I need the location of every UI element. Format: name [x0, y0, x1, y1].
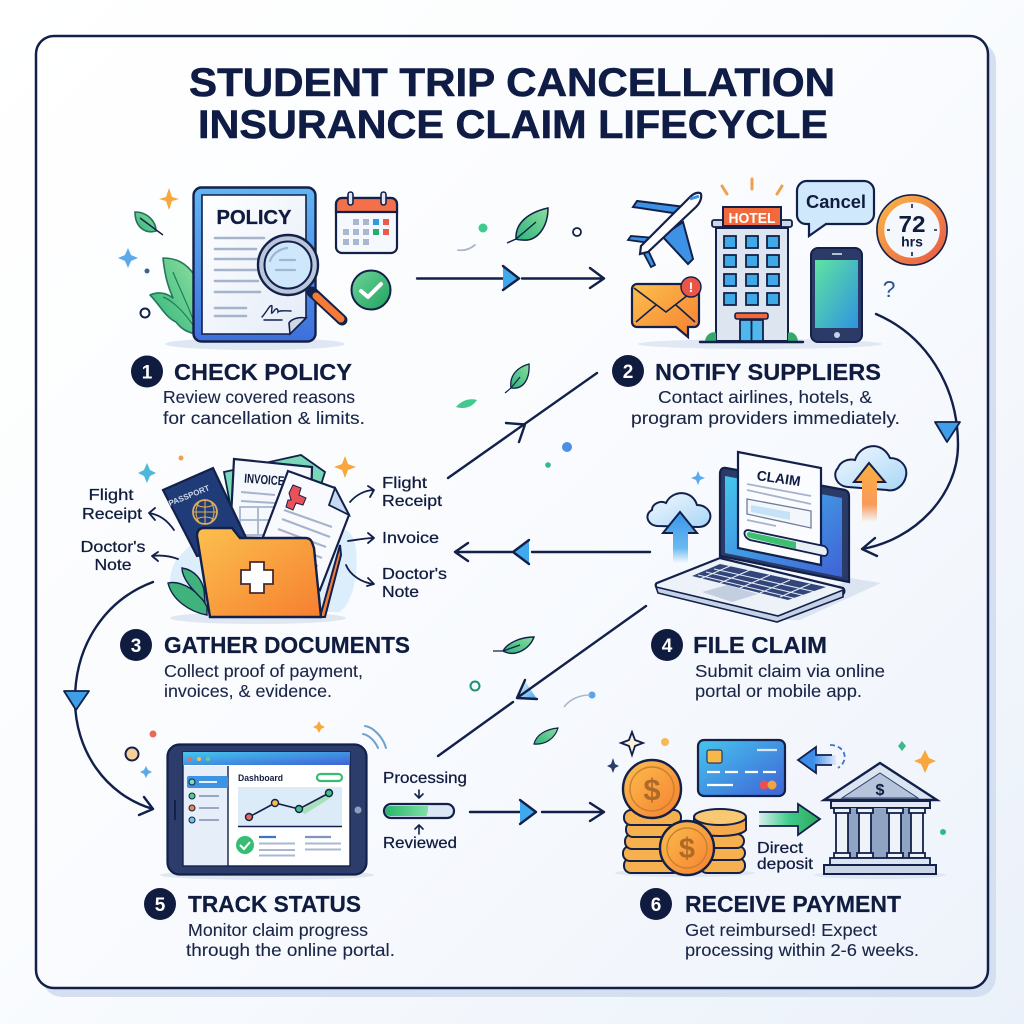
title — [189, 61, 835, 147]
laptop screen — [720, 468, 849, 582]
document labels: Note — [94, 557, 132, 574]
laptop shadow — [780, 578, 881, 620]
badge 3 — [120, 629, 152, 661]
icon: 72 hrs clock: 72 — [898, 211, 926, 237]
icon: envelope with alert: ! — [689, 279, 693, 295]
step 4 description — [695, 661, 885, 701]
icon: hotel: HOTEL — [728, 210, 776, 227]
badge 5: 5 — [155, 895, 166, 916]
check and detail lines — [236, 836, 341, 856]
step 5 description — [186, 920, 395, 960]
icon: step 4 file claim illustration — [647, 446, 906, 622]
processing status gauge: Processing — [383, 770, 467, 787]
step 6 description: processing within 2-6 weeks. — [685, 940, 919, 960]
processing status gauge — [383, 770, 467, 852]
icon: step 1 policy illustration — [118, 188, 397, 350]
document labels: Receipt — [382, 493, 443, 510]
sparkles — [138, 456, 356, 483]
step 6 description — [685, 920, 919, 960]
step 2 heading — [612, 355, 881, 387]
icon: tablet — [168, 744, 366, 874]
icon: 72 hrs clock: hrs — [901, 234, 923, 250]
icon: question mark: ? — [883, 276, 895, 302]
icon: return arrow to card — [798, 745, 845, 773]
icon: bank building — [824, 763, 937, 874]
document labels: Invoice — [382, 530, 439, 547]
document labels: Doctor's — [382, 566, 447, 583]
arrow: step 2 to step 4 — [862, 314, 960, 556]
sparkles — [607, 732, 946, 835]
direct deposit label — [757, 840, 814, 873]
icon: coin stack — [623, 760, 746, 875]
step 5 heading — [144, 888, 361, 920]
icon: medical cross — [241, 562, 273, 593]
icon: step 2 notify suppliers illustration — [628, 179, 947, 349]
badge 2: 2 — [623, 362, 633, 383]
tablet screen — [183, 752, 350, 866]
document labels: Flight — [88, 487, 134, 504]
icon: leaves — [168, 568, 207, 615]
badge 6 — [640, 888, 672, 920]
badge 1 — [131, 356, 163, 388]
step 4 description: portal or mobile app. — [695, 681, 862, 701]
document labels — [80, 475, 447, 601]
icon: bank building: $ — [876, 782, 885, 799]
title: STUDENT TRIP CANCELLATION — [189, 61, 835, 105]
icon: step 6 receive payment illustration — [607, 732, 946, 879]
document labels: Receipt — [82, 506, 143, 523]
icon: step 3 gather documents illustration — [80, 455, 447, 624]
step 2 description — [631, 387, 900, 428]
step 1 heading — [131, 356, 352, 388]
wifi arcs — [363, 726, 386, 748]
icon: green check — [352, 270, 390, 310]
icon: left cloud upload — [647, 493, 710, 563]
step 3 heading — [120, 629, 410, 661]
signature — [262, 306, 291, 320]
laptop base — [656, 558, 844, 618]
document labels: Note — [382, 584, 419, 601]
progress bar — [744, 530, 828, 556]
icon: cancel speech bubble: Cancel — [806, 192, 866, 212]
step 1 description: for cancellation & limits. — [163, 408, 365, 428]
icon: coin stack: $ — [679, 833, 695, 865]
step 4 heading: FILE CLAIM — [693, 632, 827, 658]
step 5 description: through the online portal. — [186, 940, 395, 960]
badge 6: 6 — [651, 895, 661, 916]
badge 4: 4 — [662, 636, 673, 657]
icon: right cloud upload — [835, 446, 906, 522]
icon: coin stack: $ — [643, 772, 661, 807]
sparkles and small leaf — [118, 188, 179, 318]
icon: passport — [163, 468, 250, 556]
decorative leaves and dots along the flow — [456, 208, 596, 744]
step 3 description — [164, 661, 363, 701]
step 6 heading — [640, 888, 901, 920]
icon: step 5 track status illustration — [126, 721, 467, 880]
icon: folder front — [197, 528, 321, 617]
icon: page curl — [289, 318, 306, 334]
icon: credit card — [698, 740, 785, 796]
step 1 description — [163, 387, 365, 428]
icon: cancel speech bubble — [797, 181, 874, 236]
keyboard — [692, 564, 826, 600]
arrow: step 2 to step 3 — [448, 373, 597, 478]
dashboard title: Dashboard — [238, 773, 283, 783]
direct deposit label: Direct — [757, 840, 804, 857]
icon: calendar — [336, 192, 397, 253]
icon: green sheet — [224, 455, 325, 530]
document labels: Flight — [382, 475, 428, 492]
badge 2 — [612, 355, 644, 387]
document labels: Doctor's — [80, 539, 146, 556]
window title bar — [183, 752, 350, 765]
title: INSURANCE CLAIM LIFECYCLE — [198, 103, 828, 147]
step 3 description: Collect proof of payment, — [164, 661, 363, 681]
step 4 heading — [651, 629, 827, 661]
icon: 72 hrs clock — [877, 195, 947, 265]
icon: folder back — [320, 545, 341, 617]
step 6 description: Get reimbursed! Expect — [685, 920, 877, 940]
status pill — [317, 774, 342, 781]
policy label: POLICY — [216, 207, 292, 229]
icon: document frame — [194, 188, 316, 342]
line chart — [238, 787, 342, 826]
processing status gauge: Reviewed — [383, 835, 457, 852]
step 5 heading: TRACK STATUS — [188, 891, 361, 917]
tablet hardware — [174, 800, 176, 820]
badge 5 — [144, 888, 176, 920]
badge 3: 3 — [131, 636, 141, 657]
document paper — [202, 195, 306, 334]
step 3 heading: GATHER DOCUMENTS — [164, 632, 410, 658]
icon: green direct deposit arrow — [759, 804, 820, 835]
trackpad — [702, 585, 758, 602]
claim paper: CLAIM — [756, 467, 802, 489]
icon: magnifying glass — [258, 235, 342, 320]
step 4 description: Submit claim via online — [695, 661, 885, 681]
sparkle — [691, 471, 705, 485]
step 1 heading: CHECK POLICY — [174, 359, 352, 385]
arrow: step 4 to step 5 — [438, 606, 646, 756]
icon: passport: PASSPORT — [167, 483, 211, 508]
step 2 description: Contact airlines, hotels, & — [658, 387, 872, 407]
arrow: step 5 to step 6 — [470, 800, 604, 824]
claim paper — [738, 452, 828, 565]
icon: invoice: INVOICE — [244, 471, 285, 488]
step 6 heading: RECEIVE PAYMENT — [685, 891, 901, 917]
step 1 description: Review covered reasons — [163, 387, 355, 407]
badge 4 — [651, 629, 683, 661]
arrow: step 3 to step 5 — [64, 582, 153, 815]
arrows to document labels — [149, 486, 374, 586]
sidebar — [184, 766, 228, 866]
icon: invoice — [230, 459, 312, 540]
icon: smartphone — [811, 248, 862, 342]
step 2 heading: NOTIFY SUPPLIERS — [655, 359, 881, 385]
icon: airplane — [628, 193, 701, 267]
step 2 description: program providers immediately. — [631, 408, 900, 428]
document text lines — [215, 238, 264, 316]
arrow: step 4 to step 3 — [455, 540, 650, 564]
icon: envelope with alert — [632, 277, 701, 337]
icon: doctor's note — [263, 471, 349, 590]
sparkles — [126, 721, 325, 778]
badge 1: 1 — [142, 362, 153, 384]
arrow: step 1 to step 2 — [417, 266, 604, 290]
icon: hotel — [700, 179, 803, 342]
step 5 description: Monitor claim progress — [188, 920, 368, 940]
direct deposit label: deposit — [757, 856, 814, 873]
step 3 description: invoices, & evidence. — [164, 681, 332, 701]
icon: plant — [150, 258, 195, 334]
